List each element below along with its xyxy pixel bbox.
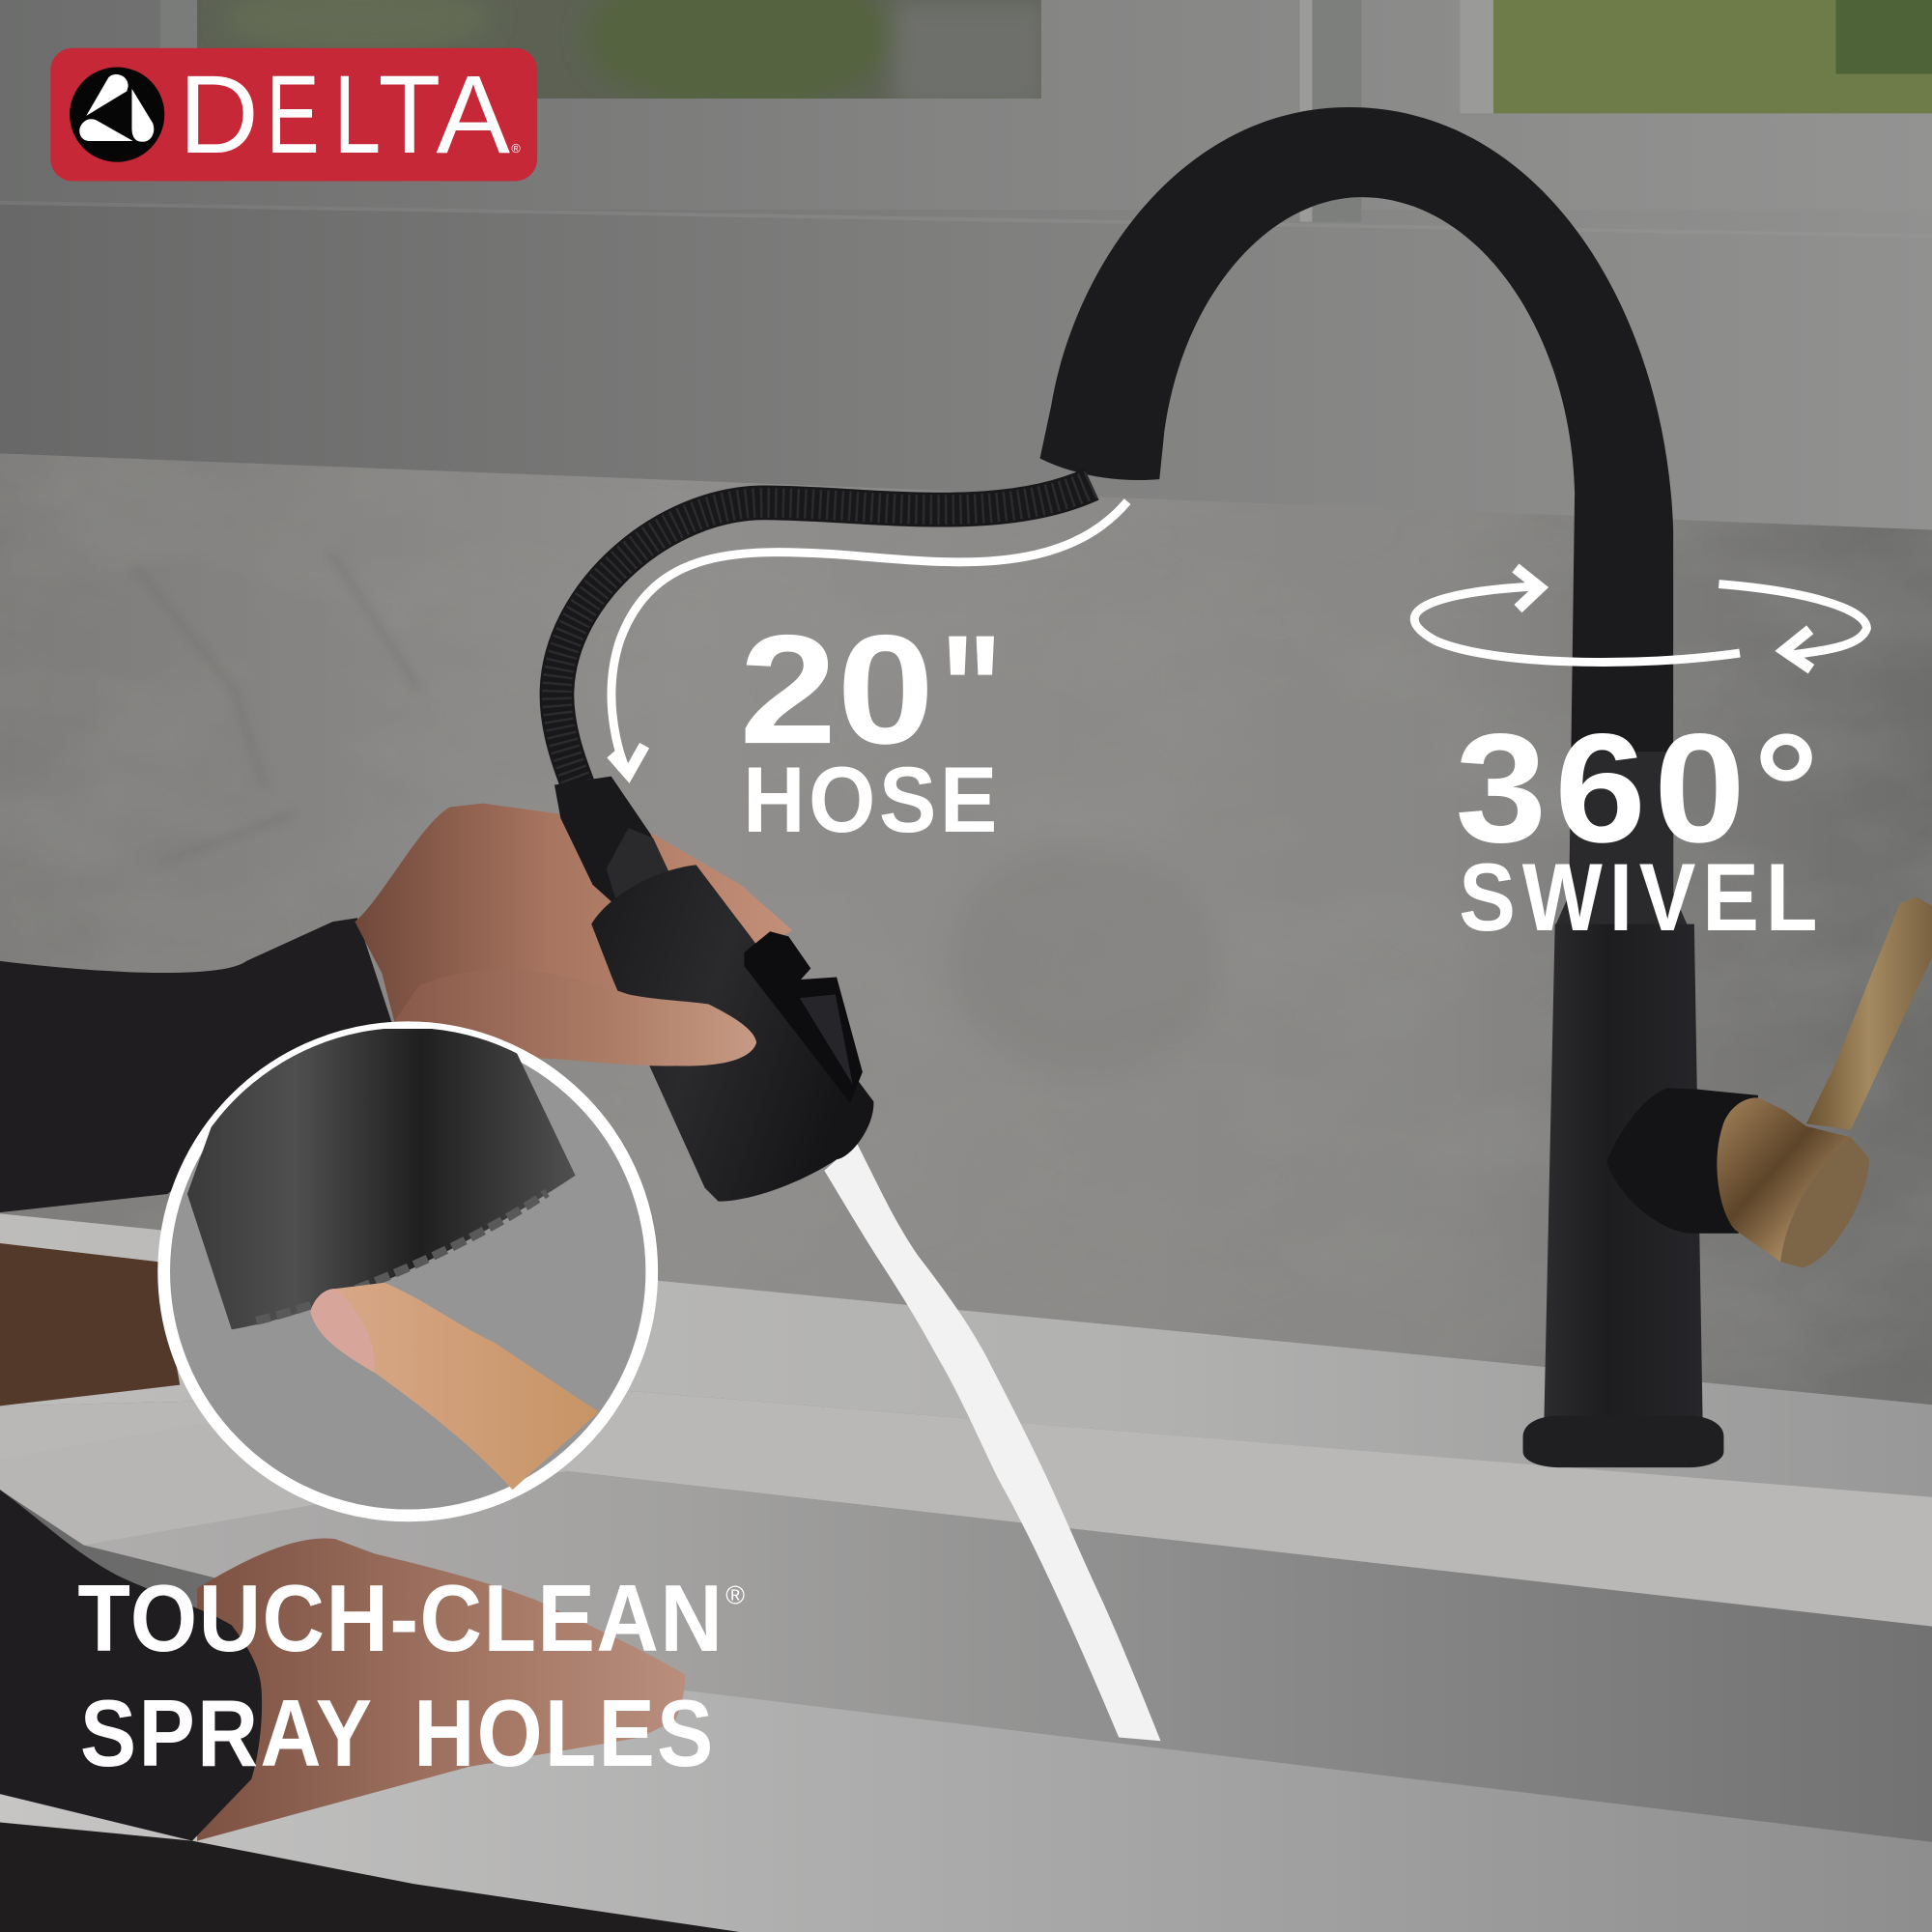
faucet base [1523, 1416, 1723, 1467]
braided hose [556, 484, 1092, 795]
arrow: swivel left [1414, 568, 1740, 662]
countertop and ledge [0, 1213, 1932, 1932]
logo wordmark: A [437, 53, 511, 177]
upper arm sleeve [0, 918, 392, 1212]
logo triangle mark [79, 74, 154, 142]
label: 20 inch hose: 20 [739, 604, 934, 777]
label: 20 inch hose: HOSE [743, 748, 1001, 852]
handle brass hub [1717, 1097, 1869, 1267]
faucet column [1544, 924, 1703, 1430]
handle black stub [1606, 1088, 1758, 1234]
water stream [824, 1142, 1161, 1741]
lower arm sleeve [0, 1490, 262, 1841]
label: 360 degree swivel [1455, 702, 1827, 951]
Delta logo: ® [511, 141, 521, 156]
label: 360 degree swivel: SWIVEL [1459, 843, 1824, 951]
nozzle close-up [187, 1029, 576, 1329]
label: touch-clean spray holes: ® [725, 1581, 745, 1610]
label: 20 inch hose: " [940, 603, 1003, 777]
logo wordmark [179, 53, 511, 177]
label: 360 degree swivel: 360° [1455, 702, 1827, 875]
label: touch-clean spray holes: TOUCH-CLEAN [77, 1565, 724, 1671]
faucet gooseneck spout [1040, 107, 1673, 936]
inset circle: touch-clean nozzle [164, 1028, 652, 1516]
logo wordmark: L [334, 53, 381, 177]
spray head connector [554, 777, 669, 908]
fingernail [310, 1289, 375, 1373]
upper hand thumb [394, 969, 756, 1065]
logo wordmark: T [379, 53, 440, 177]
handle lever [1806, 897, 1932, 1130]
cutting board [0, 1243, 180, 1406]
label: touch-clean spray holes [77, 1565, 745, 1786]
arrow: hose length [611, 501, 1127, 774]
spray head body [591, 865, 873, 1202]
spray holes [256, 1193, 547, 1321]
arrow: swivel right [1719, 584, 1866, 669]
logo wordmark: D [179, 53, 259, 177]
logo wordmark: E [267, 53, 320, 177]
spray buttons [744, 931, 863, 1103]
label: touch-clean spray holes: SPRAY HOLES [80, 1680, 716, 1786]
faucet collar [1555, 752, 1688, 926]
lower hand [197, 1538, 685, 1841]
faucet [1040, 107, 1932, 1467]
marble backsplash [0, 453, 1932, 1414]
handle end face [1780, 1137, 1869, 1267]
Delta logo [50, 48, 537, 181]
fingertip [310, 1283, 599, 1490]
upper hand [355, 804, 792, 1059]
label: 20 inch hose [739, 603, 1003, 852]
